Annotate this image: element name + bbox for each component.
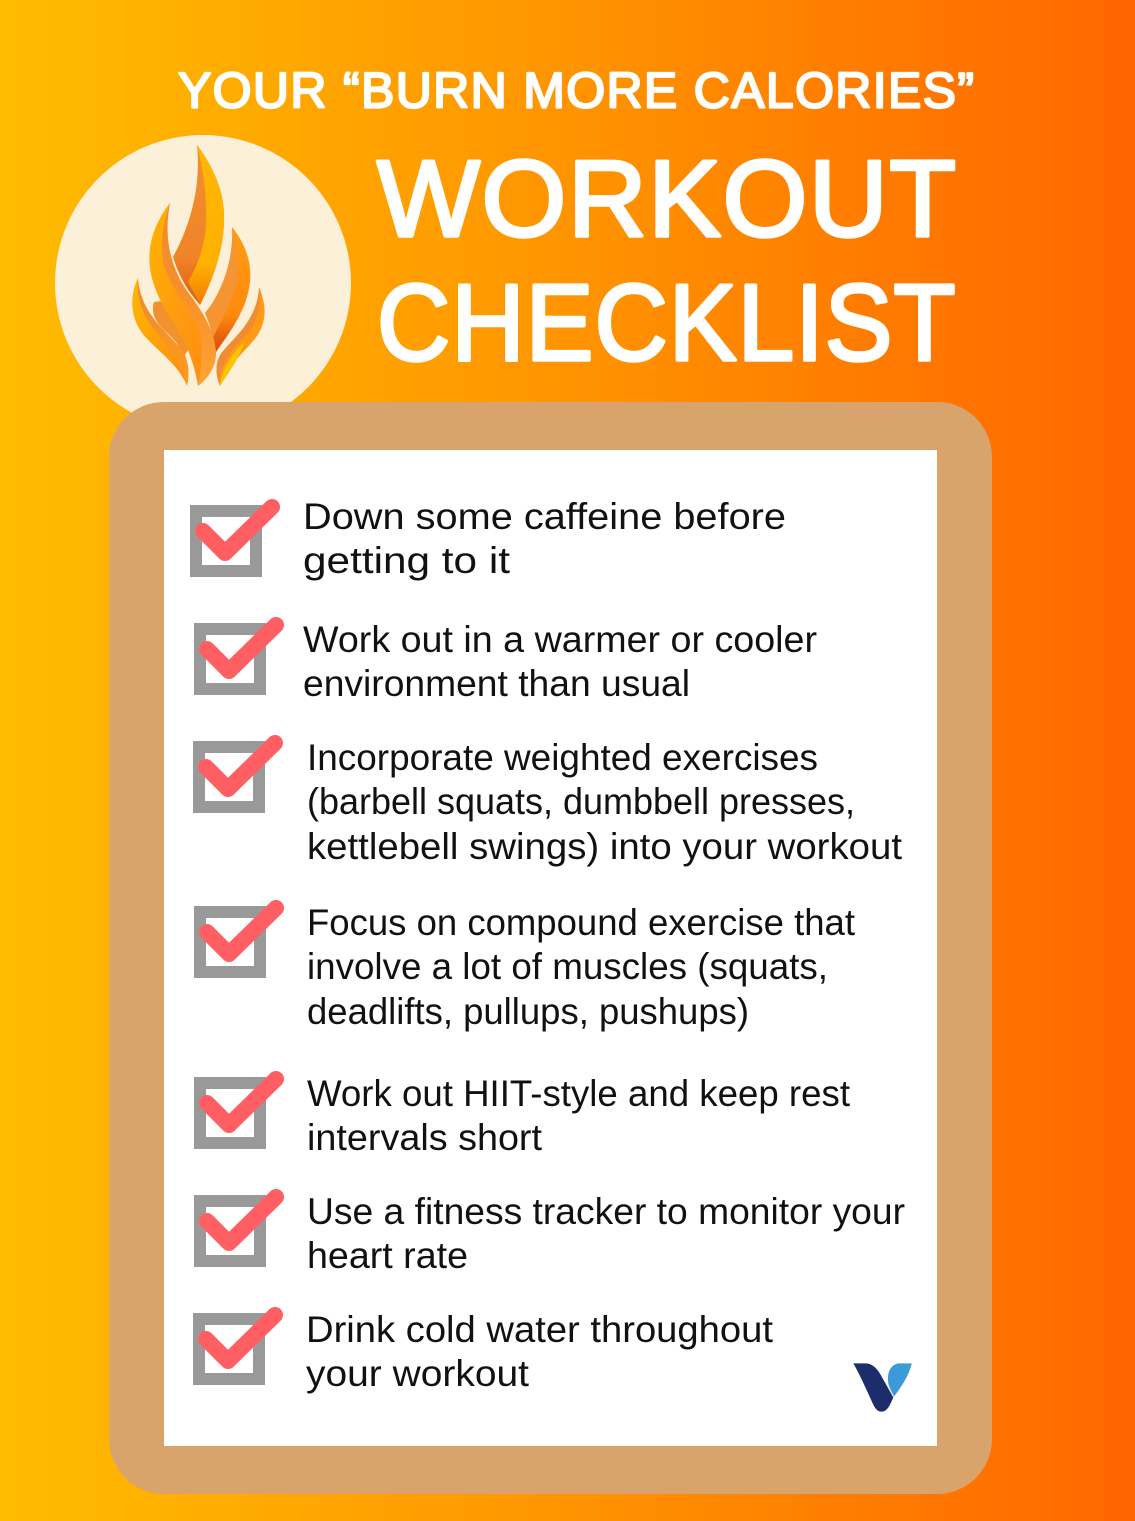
checklist item 2 — [200, 619, 817, 704]
item 2 text: environment than usual — [303, 663, 690, 704]
checklist item 4 — [200, 902, 856, 1032]
icon: circle background — [55, 135, 351, 431]
checkbox icon 1 — [196, 507, 272, 571]
item 2 text — [303, 619, 817, 704]
item 3 text: kettlebell swings) into your workout — [307, 826, 903, 867]
item 3 text: Incorporate weighted exercises — [307, 737, 818, 778]
item 1 text: getting to it — [303, 540, 511, 581]
item 4 text: Focus on compound exercise that — [307, 902, 856, 943]
title line: your burn more calories: YOUR “BURN MORE CALORIES” — [178, 62, 974, 118]
item 7 text — [306, 1309, 774, 1394]
icon: V logo — [853, 1363, 912, 1412]
item 3 text — [307, 737, 903, 867]
icon: flame — [132, 145, 265, 386]
item 2 text: Work out in a warmer or cooler — [303, 619, 817, 660]
checklist item 6 — [200, 1191, 905, 1276]
item 6 text — [307, 1191, 905, 1276]
item 5 text: Work out HIIT-style and keep rest — [307, 1073, 851, 1114]
checkbox icon 3 — [199, 743, 275, 807]
item 4 text: deadlifts, pullups, pushups) — [307, 991, 749, 1032]
item 6 text: Use a fitness tracker to monitor your — [307, 1191, 905, 1232]
checklist item 5 — [200, 1073, 851, 1158]
checklist item 3 — [199, 737, 903, 867]
clipboard paper — [164, 450, 937, 1446]
item 6 text: heart rate — [307, 1235, 468, 1276]
item 1 text: Down some caffeine before — [303, 496, 786, 537]
item 5 text: intervals short — [307, 1117, 543, 1158]
checkbox icon 6 — [200, 1197, 276, 1261]
item 3 text: (barbell squats, dumbbell presses, — [307, 781, 855, 822]
item 4 text: involve a lot of muscles (squats, — [307, 946, 828, 987]
item 7 text: your workout — [306, 1353, 530, 1394]
item 1 text — [303, 496, 786, 581]
checkbox icon 2 — [200, 625, 276, 689]
checkbox icon 4 — [200, 908, 276, 972]
item 4 text — [307, 902, 856, 1032]
checklist item 1 — [196, 496, 786, 581]
clipboard board — [109, 402, 992, 1494]
checklist item 7 — [199, 1309, 774, 1394]
checkbox icon 5 — [200, 1079, 276, 1143]
checkbox icon 7 — [199, 1315, 275, 1379]
title: workout: WORKOUT — [377, 138, 956, 260]
item 7 text: Drink cold water throughout — [306, 1309, 774, 1350]
item 5 text — [307, 1073, 851, 1158]
title: checklist: CHECKLIST — [377, 263, 955, 384]
